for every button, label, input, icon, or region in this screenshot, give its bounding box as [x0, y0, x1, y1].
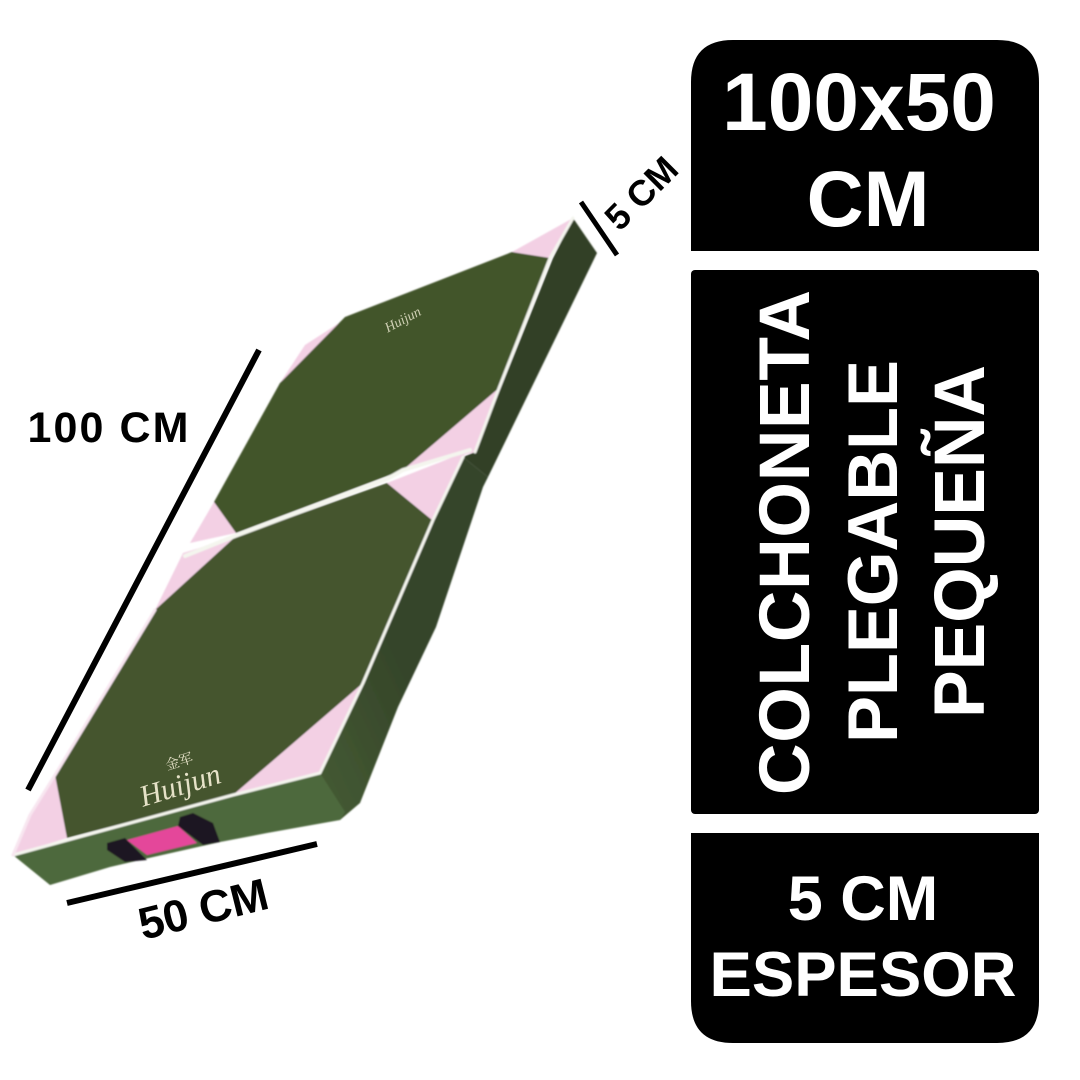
- panel: product name: [691, 270, 1039, 814]
- vertical text: colchoneta: COLCHONETA: [745, 290, 825, 795]
- panel text: CM: CM: [807, 154, 929, 243]
- folding mat illustration: [13, 218, 597, 885]
- pink corners: [13, 218, 573, 855]
- brand logo lower: Huijun: [135, 758, 225, 814]
- handle: left strap: [107, 838, 147, 862]
- mat right side upper section: [463, 218, 597, 477]
- panel text: 5 cm: 5 CM: [788, 864, 938, 934]
- brand logo upper: Huijun: [382, 305, 424, 337]
- panel: size: [691, 40, 1039, 251]
- mat right side lower section: [320, 457, 488, 820]
- dimension line: 50 cm: [67, 844, 317, 903]
- panel text: espesor: ESPESOR: [710, 940, 1016, 1010]
- vertical text: plegable: PLEGABLE: [833, 360, 912, 743]
- panel text: 100x50: 100x50: [722, 57, 996, 148]
- white piping: [13, 218, 573, 855]
- vertical text: pequena: PEQUEÑA: [919, 365, 1000, 718]
- lower green panel: [55, 483, 432, 838]
- panel: thickness: [691, 833, 1039, 1043]
- dimension label: 50 cm: 50 CM: [133, 868, 273, 950]
- handle: pink band: [127, 826, 197, 855]
- dimension label: 100 cm: 100 CM: [28, 404, 188, 452]
- dimension label: 5 cm: 5 CM: [596, 148, 686, 238]
- handle: right strap: [178, 813, 220, 845]
- brand logo lower: 金军: [164, 750, 195, 774]
- mat front face: [13, 773, 345, 885]
- dimension line: 5 cm: [581, 202, 617, 255]
- upper green panel: [214, 252, 550, 533]
- dimension line: 100 cm: [28, 350, 259, 790]
